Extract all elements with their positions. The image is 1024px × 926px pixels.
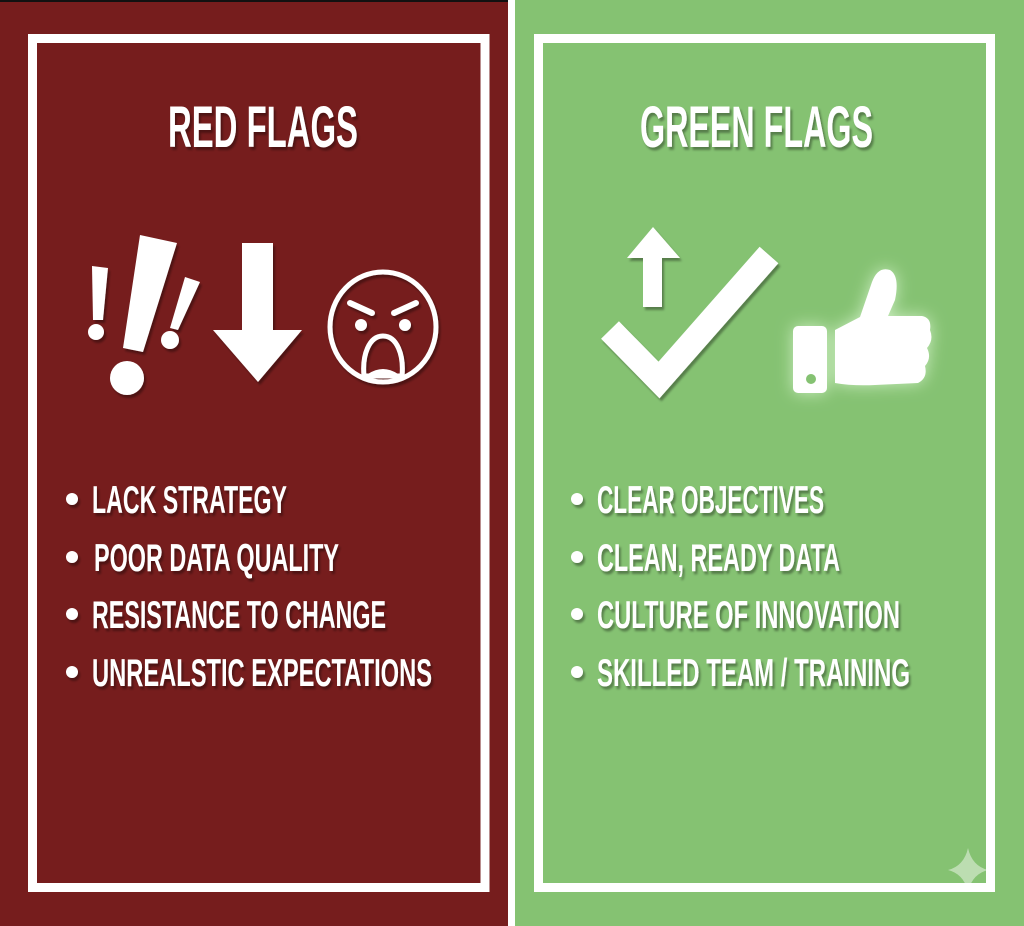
icon: angry face: [330, 272, 436, 382]
list: red flags: RESISTANCE TO CHANGE: [92, 594, 386, 637]
divider: [508, 0, 515, 926]
icon: sparkle: [948, 848, 988, 892]
icon: checkmark: [610, 255, 769, 380]
list: green flags: CLEAN, READY DATA: [597, 537, 840, 580]
icon: down arrow: [213, 243, 302, 382]
panel: red flags: [0, 0, 508, 926]
icons: green: [610, 227, 931, 393]
frame: green: [538, 38, 990, 888]
icons: red: [88, 235, 436, 395]
list: red flags: [66, 479, 432, 695]
list: green flags: [571, 479, 910, 695]
panel: green flags: [515, 0, 1024, 926]
icon: exclamation marks: [88, 235, 200, 395]
icon: thumbs up: [793, 269, 931, 393]
list: red flags: POOR DATA QUALITY: [94, 537, 339, 580]
icon: up arrow: [627, 227, 680, 307]
frame: red: [32, 38, 485, 888]
list: red flags: UNREALSTIC EXPECTATIONS: [92, 652, 432, 695]
title: red flags: RED FLAGS: [168, 95, 358, 160]
list: red flags: LACK STRATEGY: [92, 479, 287, 522]
list: green flags: CLEAR OBJECTIVES: [597, 479, 824, 522]
